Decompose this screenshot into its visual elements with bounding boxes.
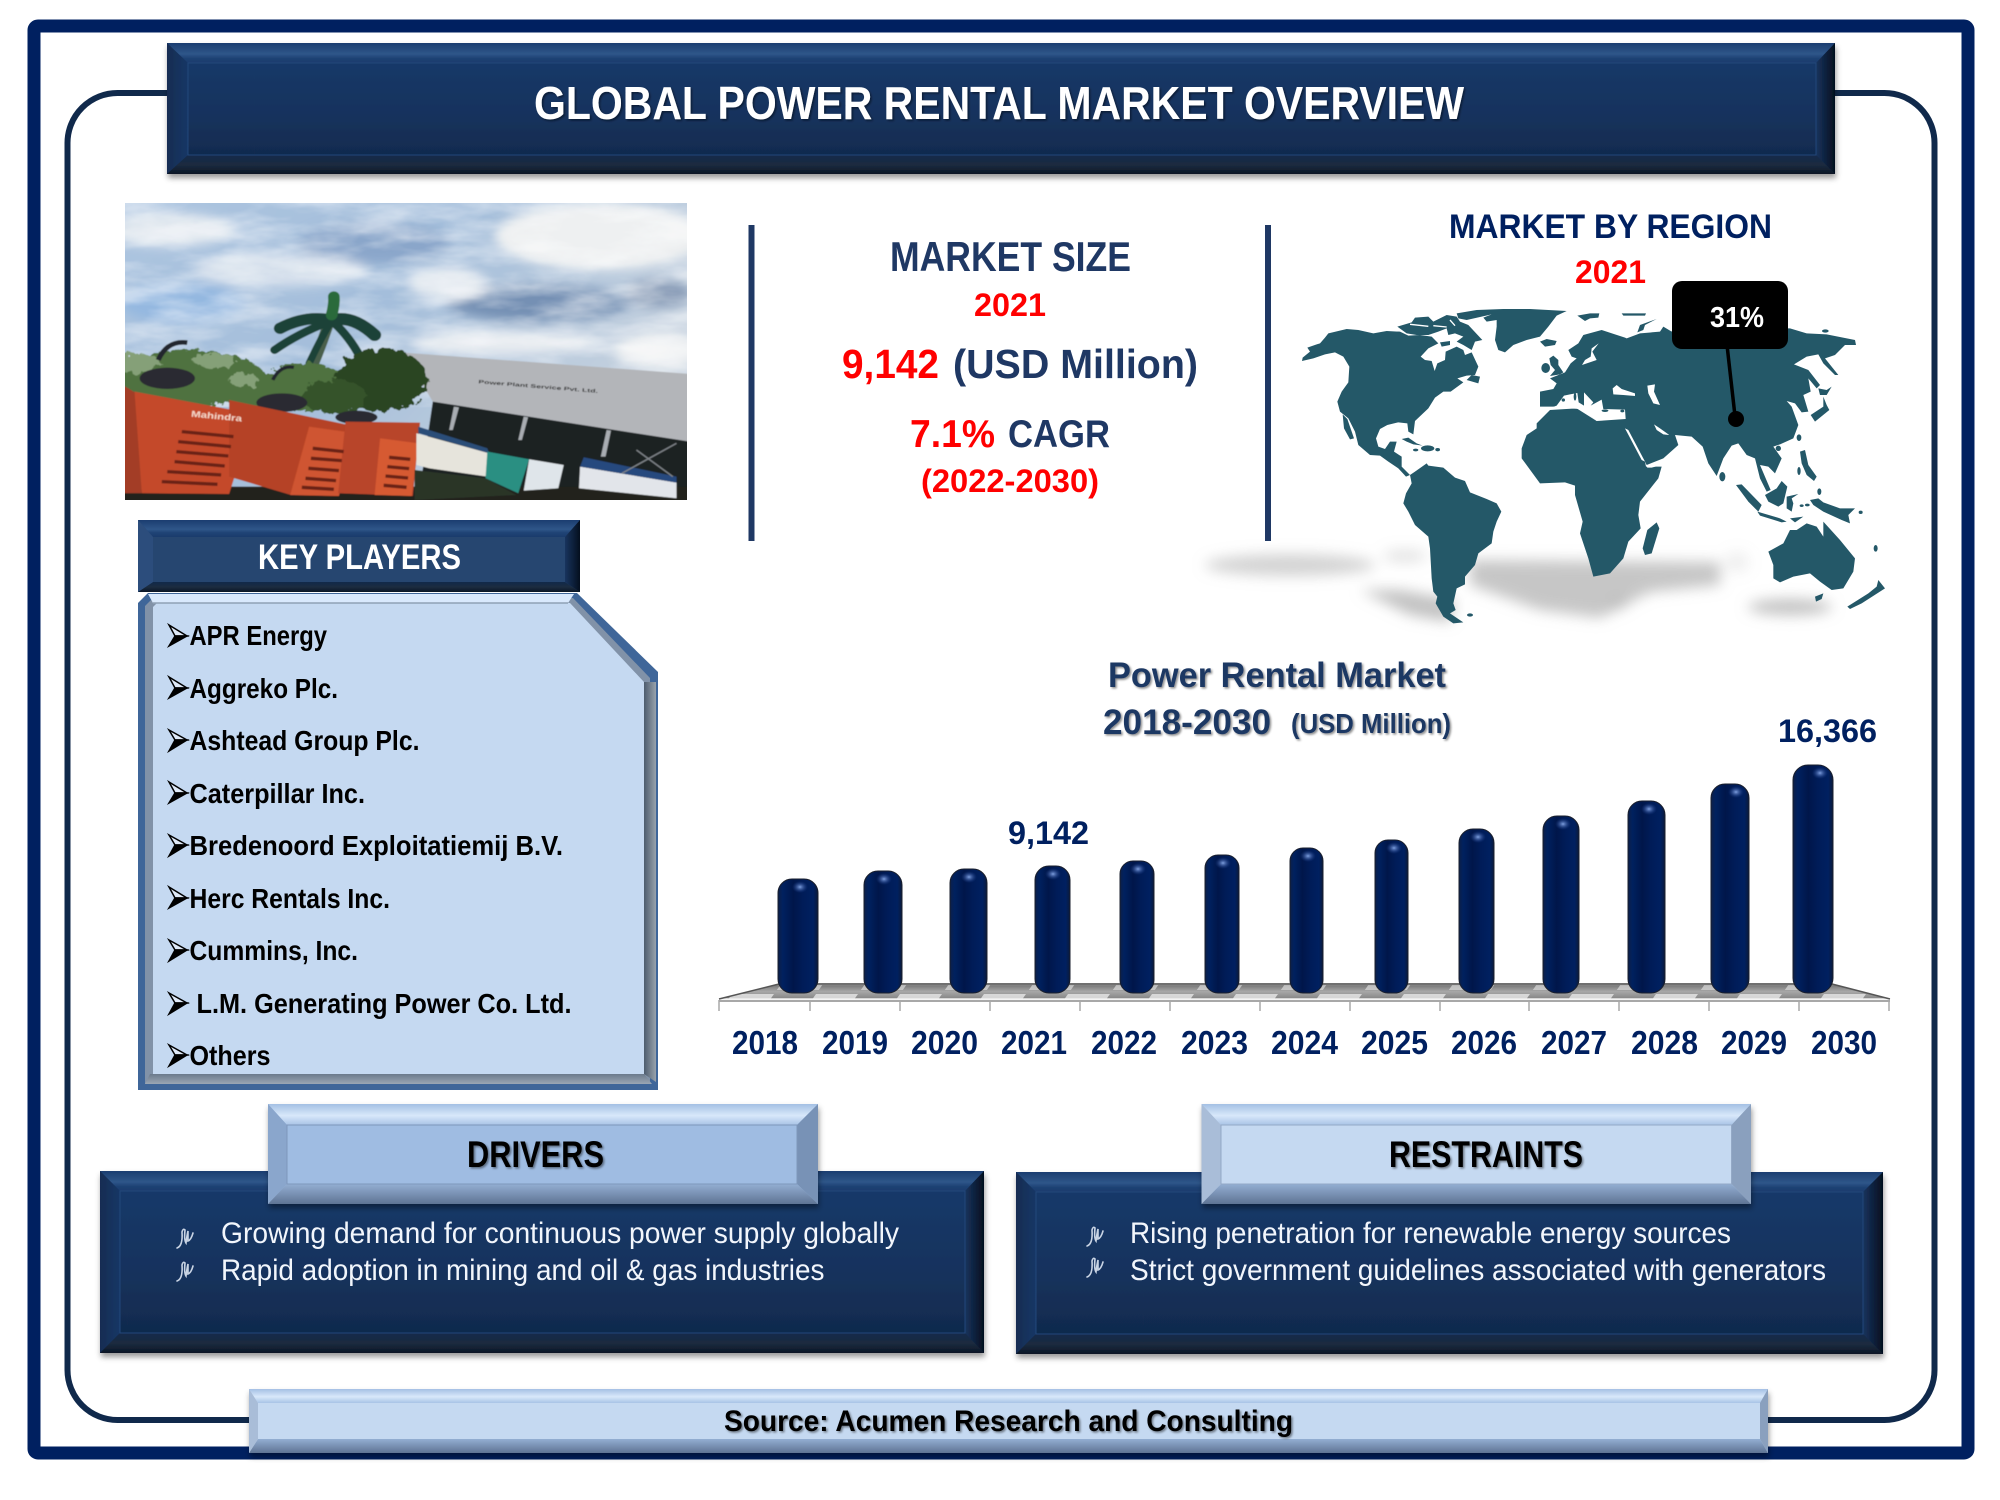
bar value labels [1008, 713, 1877, 851]
americas and north atlantic landmasses [1302, 309, 1567, 623]
photo: generators at rental yard [109, 200, 706, 510]
year axis labels: 2022 [1091, 1024, 1157, 1061]
market size stats [842, 233, 1198, 499]
year axis labels: 2028 [1631, 1024, 1698, 1061]
list items: Caterpillar Inc. [190, 778, 365, 809]
market size stats: 9,142 [842, 341, 939, 387]
list items [169, 620, 572, 1071]
drivers tab: DRIVERS [467, 1134, 604, 1175]
restraints text [1130, 1217, 1826, 1287]
year axis labels: 2030 [1811, 1024, 1877, 1061]
key players heading [138, 520, 580, 592]
panel: key players list [138, 593, 658, 1090]
chart title: Power Rental Market [1108, 656, 1446, 695]
year axis labels: 2021 [1001, 1024, 1067, 1061]
map shadow [1205, 550, 1832, 622]
list items: Bredenoord Exploitatiemij B.V. [190, 830, 563, 861]
market by region heading: MARKET BY REGION [1449, 208, 1772, 246]
year axis labels: 2018 [732, 1024, 798, 1061]
restraints tab [1202, 1104, 1751, 1204]
chart title: (USD Million) [1291, 708, 1451, 739]
eurasia, africa and oceania landmasses [1522, 313, 1885, 609]
list items: Ashtead Group Plc. [190, 725, 420, 756]
year axis labels: 2019 [822, 1024, 888, 1061]
market by region heading: 2021 [1575, 254, 1646, 290]
drivers text: Growing demand for continuous power supply globally [221, 1217, 899, 1250]
market size divider [748, 225, 754, 541]
list items: Herc Rentals Inc. [190, 883, 390, 914]
bar chart: market size 2018-2030 [719, 713, 1890, 1061]
list items: Aggreko Plc. [190, 673, 338, 704]
market size stats: (USD Million) [953, 341, 1198, 387]
region divider [1265, 225, 1271, 541]
bar value labels: 16,366 [1778, 713, 1877, 749]
year axis labels: 2025 [1361, 1024, 1428, 1061]
source bar: Source: Acumen Research and Consulting [724, 1405, 1293, 1438]
bars [778, 765, 1833, 993]
title: GLOBAL POWER RENTAL MARKET OVERVIEW [534, 77, 1465, 129]
drivers bullet icons [177, 1229, 193, 1281]
callout: 31% Asia-Pacific [1672, 281, 1788, 427]
year axis labels: 2027 [1541, 1024, 1607, 1061]
drivers text [221, 1217, 899, 1287]
market size stats: 2021 [974, 287, 1046, 323]
year axis labels: 2024 [1271, 1024, 1339, 1061]
year axis labels: 2020 [911, 1024, 978, 1061]
list items: Others [190, 1040, 270, 1071]
list items: L.M. Generating Power Co. Ltd. [196, 988, 572, 1019]
chart title [1103, 656, 1451, 742]
year axis labels [732, 1024, 1877, 1061]
drivers text: Rapid adoption in mining and oil & gas industries [221, 1254, 824, 1287]
chart floor [719, 984, 1890, 1011]
restraints bullet icons [1087, 1227, 1103, 1277]
year axis labels: 2029 [1721, 1024, 1787, 1061]
bar value labels: 9,142 [1008, 815, 1089, 851]
drivers tab [268, 1104, 818, 1204]
list items: Cummins, Inc. [190, 935, 358, 966]
chart title: 2018-2030 [1103, 703, 1271, 742]
inland seas [1549, 343, 1669, 468]
small generators [416, 433, 489, 477]
list items: APR Energy [190, 620, 327, 651]
photo: generators at rental yard: Power Plant Service Pvt. Ltd. [478, 380, 599, 395]
photo: generators at rental yard: Mahindra [191, 409, 244, 424]
title banner [167, 43, 1835, 174]
panel: drivers [100, 1171, 984, 1353]
restraints text: Rising penetration for renewable energy sources [1130, 1217, 1731, 1250]
market size stats: CAGR [1008, 413, 1110, 456]
key players heading: KEY PLAYERS [258, 538, 461, 577]
year axis labels: 2023 [1181, 1024, 1248, 1061]
market size stats: (2022-2030) [921, 463, 1099, 499]
market size stats: MARKET SIZE [890, 233, 1131, 280]
restraints text: Strict government guidelines associated with generators [1130, 1254, 1826, 1287]
generators [125, 386, 142, 494]
restraints tab: RESTRAINTS [1389, 1134, 1583, 1175]
world map [1205, 309, 1885, 623]
market by region heading [1449, 208, 1772, 290]
year axis labels: 2026 [1451, 1024, 1517, 1061]
callout: 31% Asia-Pacific: 31% [1710, 302, 1764, 334]
panel: restraints [1016, 1172, 1883, 1354]
market size stats: 7.1% [910, 413, 995, 456]
source bar [249, 1389, 1768, 1453]
